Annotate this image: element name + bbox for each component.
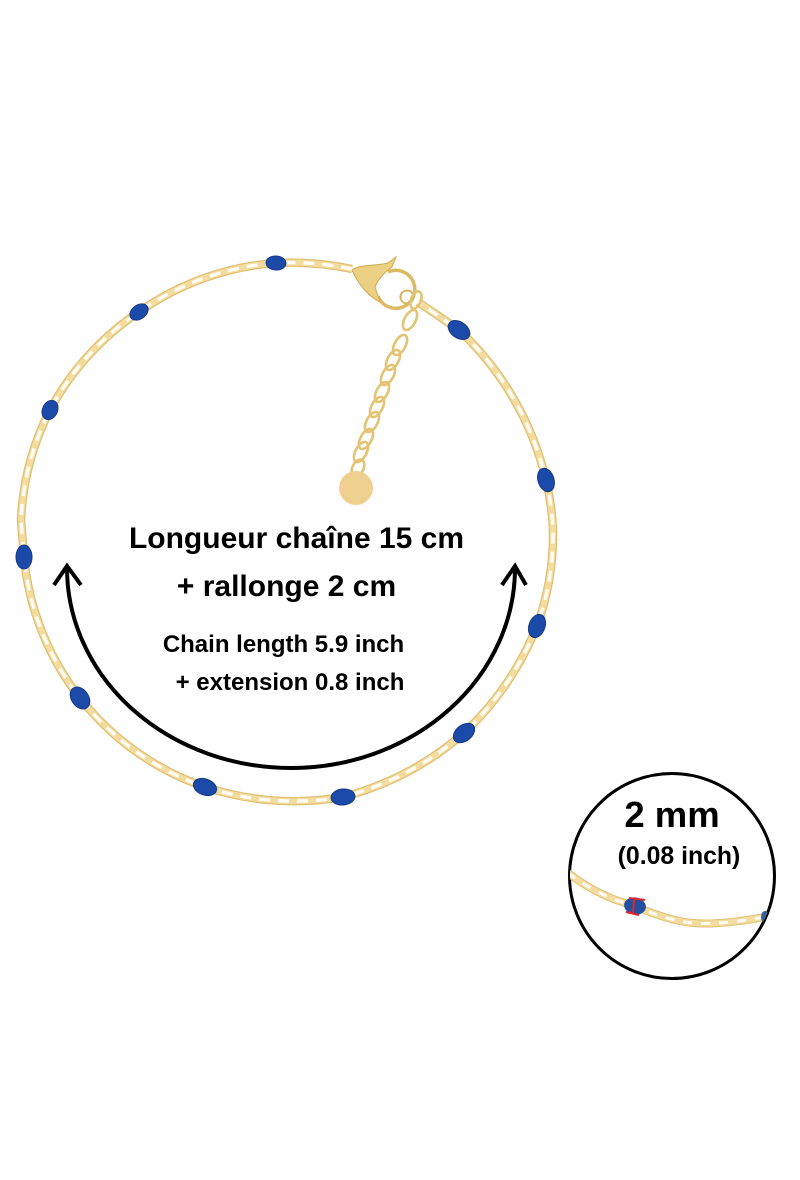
French length text: + rallonge 2 cm xyxy=(177,570,396,603)
English length text: Chain length 5.9 inch xyxy=(163,631,404,658)
arc arrow xyxy=(54,566,526,768)
extension chain and tag xyxy=(339,290,424,505)
detail chain xyxy=(568,873,775,924)
French length text: Longueur chaîne 15 cm xyxy=(129,522,464,555)
detail circle: bead size: (0.08 inch) xyxy=(618,843,740,870)
bracelet chain xyxy=(21,263,553,801)
blue enamel beads xyxy=(16,255,557,806)
detail bead with red measure mark xyxy=(622,895,648,917)
English length text: + extension 0.8 inch xyxy=(176,669,404,696)
French length text xyxy=(129,522,464,603)
lobster clasp xyxy=(352,257,415,308)
infographic canvas xyxy=(16,256,776,980)
detail size labels: 2 mm xyxy=(624,794,720,835)
detail circle: bead size xyxy=(568,774,775,978)
English length text xyxy=(163,631,404,696)
